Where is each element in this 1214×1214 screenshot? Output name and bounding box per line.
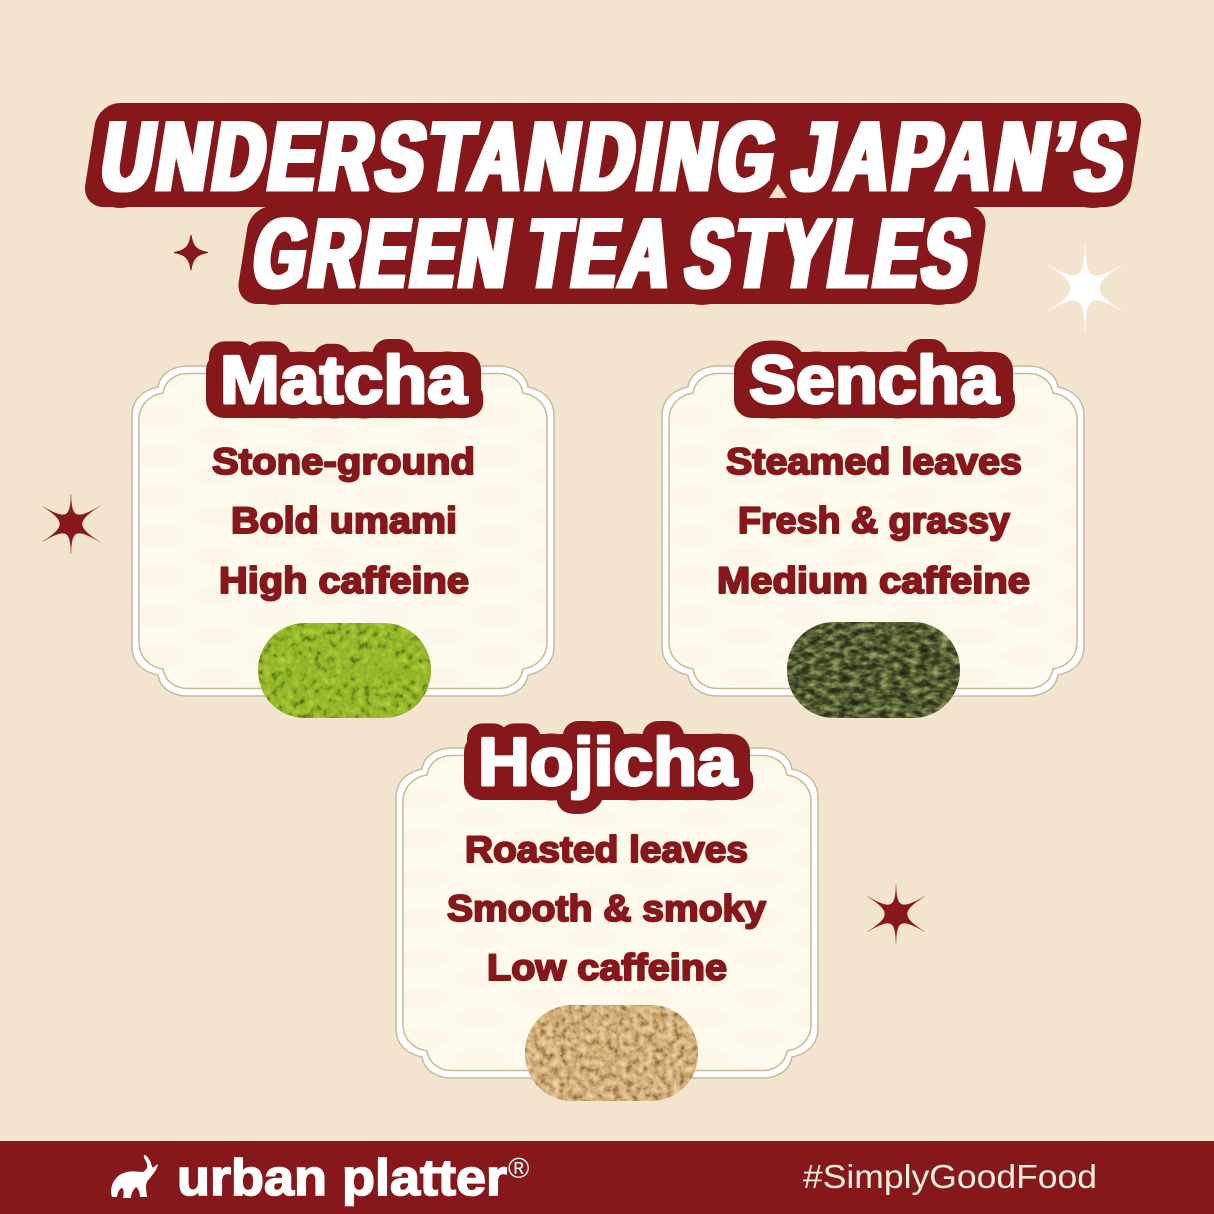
image: hojicha powder	[525, 1005, 698, 1101]
heading: Hojicha: Hojicha	[478, 724, 738, 800]
heading: Matcha: Matcha	[220, 342, 468, 418]
text: Sencha traits: Medium caffeine	[717, 560, 1030, 601]
text: Matcha traits: Stone-ground	[212, 441, 475, 482]
registered mark: ®	[508, 1153, 529, 1185]
icon: maroon sparkle right	[867, 884, 925, 944]
card frame	[396, 748, 818, 1078]
text: Hojicha traits: Smooth & smoky	[447, 888, 766, 929]
text: Hojicha traits: Roasted leaves	[465, 829, 748, 870]
heading: Hojicha: Hojicha	[478, 724, 738, 800]
heading: Matcha: Matcha	[220, 342, 468, 418]
text: Sencha traits: Fresh & grassy	[738, 500, 1010, 541]
icon: elephant logo	[111, 1155, 158, 1198]
panel: Matcha	[132, 342, 554, 718]
logo wordmark: urban platter	[177, 1149, 507, 1206]
panel: Hojicha	[396, 724, 818, 1101]
text: Hojicha traits	[447, 829, 766, 988]
text: Matcha traits: Bold umami	[231, 500, 457, 541]
text: Sencha traits	[717, 441, 1030, 601]
panel: Sencha	[662, 342, 1084, 718]
heading: Sencha: Sencha	[749, 342, 1000, 418]
image: sencha leaves	[787, 622, 960, 718]
text: Matcha traits: High caffeine	[219, 560, 469, 601]
card frame	[132, 366, 554, 696]
image: matcha powder	[258, 623, 431, 718]
card frame	[662, 366, 1084, 696]
hashtag: #SimplyGoodFood	[803, 1158, 1097, 1195]
footer band	[0, 1141, 1214, 1214]
text: Hojicha traits: Low caffeine	[487, 947, 727, 988]
text: Sencha traits: Steamed leaves	[726, 441, 1022, 482]
title	[82, 102, 1144, 308]
text: Matcha traits	[212, 441, 475, 601]
heading: Sencha: Sencha	[749, 342, 1000, 418]
icon: small maroon sparkle	[174, 235, 208, 270]
icon: white sparkle	[1048, 244, 1122, 332]
icon: maroon sparkle left	[42, 494, 100, 554]
